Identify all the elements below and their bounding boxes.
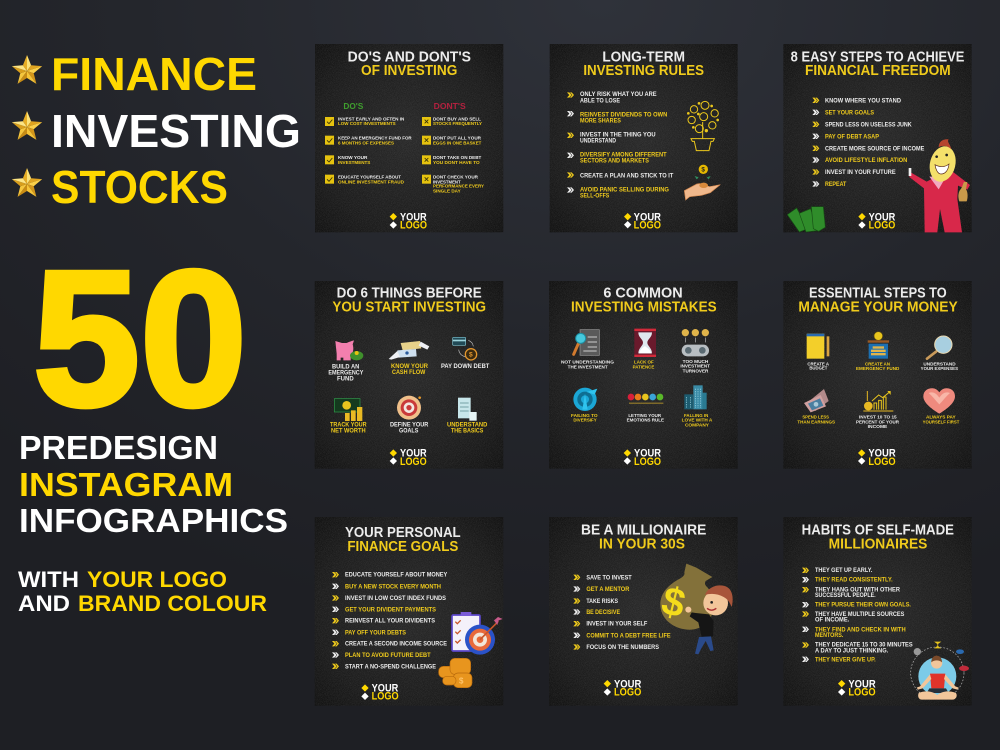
title [791,49,965,79]
text block: predesign instagram infographics: INSTAGRAM [19,466,233,503]
column: dont's: DONT TAKE ON DEBT [433,155,481,161]
list of rules: INVEST IN THE THING YOU [580,133,656,139]
title [571,286,717,316]
title: OF INVESTING [361,63,457,79]
item: create an emergency fund: CREATE AN [865,361,890,367]
column: dont's: SINGLE DAY [433,188,461,194]
item: falling in love with a company: LOVE WITH A [682,418,713,424]
item: spend less [797,389,836,425]
item: not understanding: THE INVESTMENT [568,364,608,370]
column: do's: INVESTMENTS [338,160,371,166]
item: emotions rule: LETTING YOUR [628,413,661,419]
item: invest percent of income: INVEST 10 TO 15 [859,415,897,421]
list of tips [573,575,671,651]
item: failing to diversify [571,388,598,424]
title: LONG-TERM [602,49,685,65]
column: dont's: DONT PUT ALL YOUR [433,136,481,142]
icon: gold coins [439,658,472,688]
column: do's: KNOW YOUR [338,155,368,161]
item: falling in love with a company: COMPANY [685,422,710,428]
list of tips: INVEST IN YOUR SELF [586,622,648,628]
column: dont's: YOU DONT HAVE TO [433,160,480,166]
title: MILLIONAIRES [829,536,928,552]
list of habits: THEY HANG OUT WITH OTHER [815,587,901,593]
logo [858,211,896,232]
item: falling in love with a company: FALLING IN [684,413,709,419]
column: dont's: DONT CHECK YOUR [433,175,478,181]
item: invest percent of income: INCOME [868,424,888,430]
big number 50: 50 [33,230,247,446]
column: dont's: DONT'S [434,101,466,111]
list of rules: SELL-OFFS [580,194,609,200]
list of steps: REPEAT [825,182,847,188]
column: dont's: EGGS IN ONE BASKET [433,140,481,146]
list of steps: KNOW WHERE YOU STAND [825,98,902,104]
text block: with your logo and brand colour: BRAND COLOUR [78,591,267,616]
icon: green money [787,207,825,232]
title [332,286,486,316]
column: do's: LOW COST INVESTMENTS [338,121,396,127]
logo: YOUR [372,682,399,694]
list of habits: A DAY TO JUST THINKING. [815,648,889,654]
logo: YOUR [869,211,896,223]
item: understand your expenses [921,336,959,372]
column: do's: 6 MONTHS OF EXPENSES [338,140,395,146]
heading: investing: INVESTING [51,105,301,157]
item: spend less: THAN EARNINGS [797,419,836,425]
column: dont's: PERFORMANCE EVERY [433,184,485,190]
icon: star 1 [12,55,42,84]
list of goals: PAY OFF YOUR DEBTS [345,630,406,636]
icon: boy carrying money bag [657,564,733,654]
title: FINANCIAL FREEDOM [805,63,951,79]
item: invest percent of income [856,391,899,430]
item: invest percent of income: PERCENT OF YOUR [856,419,899,425]
item: emergency fund: BUILD AN [332,365,359,371]
title: ESSENTIAL STEPS TO [809,286,947,302]
logo: LOGO [400,456,427,468]
text block: predesign instagram infographics [19,429,288,539]
item: cash flow: KNOW YOUR [391,364,429,370]
list of goals: PLAN TO AVOID FUTURE DEBT [345,653,431,659]
list of steps: SET YOUR GOALS [825,110,874,116]
list of habits: THEY HAVE MULTIPLE SOURCES [815,612,904,618]
logo: LOGO [614,686,641,698]
logo: LOGO [634,219,661,231]
list of tips: BE DECISIVE [586,610,620,616]
column: dont's [422,101,485,194]
logo: YOUR [848,678,876,690]
logo: YOUR [400,448,427,460]
list of tips: TAKE RISKS [586,599,618,605]
list of steps: SPEND LESS ON USELESS JUNK [825,122,912,128]
title: BE A MILLIONAIRE [581,522,707,538]
list of steps [812,98,924,188]
panel: 8 easy steps to achieve financial freedom [783,44,972,232]
list of tips: COMMIT TO A DEBT FREE LIFE [586,633,671,639]
column: do's: DO'S [343,101,364,111]
list of habits: MENTORS. [815,633,844,639]
list of rules: MORE SHARES [580,118,621,124]
logo [390,448,427,468]
item: net worth: TRACK YOUR [330,423,367,429]
text block: with your logo and brand colour: WITH [18,567,79,592]
list of habits: THEY PURSUE THEIR OWN GOALS. [815,603,911,609]
item: create a budget: BUDGET [809,366,827,372]
title: DO 6 THINGS BEFORE [337,286,482,302]
list of goals: START A NO-SPEND CHALLENGE [345,664,436,670]
title: INVESTING RULES [583,63,704,79]
list of rules: DIVERSIFY AMONG DIFFERENT [580,153,667,159]
item: emergency fund: EMERGENCY [328,371,363,377]
column: do's [325,101,412,185]
list of tips: SAVE TO INVEST [586,575,632,581]
item: understand your expenses: YOUR EXPENSES [921,366,959,372]
list of goals: BUY A NEW STOCK EVERY MONTH [345,584,441,590]
item: define goals: DEFINE YOUR [390,423,429,429]
list of habits: THEY NEVER GIVE UP. [815,657,876,663]
item: too much turnover: TOO MUCH [683,359,709,365]
icon: hand with coin: $ [701,167,705,174]
item: lack of patience: LACK OF [634,360,654,366]
item: net worth: NET WORTH [331,429,366,435]
text block: with your logo and brand colour: AND [18,591,70,616]
list of goals: CREATE A SECOND INCOME SOURCE [345,642,447,648]
icon: clipboard and target [452,612,503,655]
logo [624,448,661,468]
item: not understanding [561,330,614,370]
column: dont's: DONT BUY AND SELL [433,116,481,122]
item: pay down debt: $ [469,352,473,359]
column: do's: ONLINE INVESTMENT FRAUD [338,179,404,185]
title: HABITS OF SELF-MADE [802,522,954,538]
heading: stocks: STOCKS [51,161,228,213]
title [581,522,707,552]
list of habits: SUCCESSFUL PEOPLE. [815,593,876,599]
list of rules [567,92,674,200]
icon: money tree [687,101,719,151]
item: create an emergency fund [856,332,900,372]
logo: YOUR [868,448,896,460]
title [798,286,958,316]
item: net worth [330,399,367,435]
item: lack of patience [633,329,656,370]
panel: be a millionaire in your 30s [549,517,738,706]
title [583,49,704,79]
icon: meditating person [911,642,969,700]
item: understand your expenses: UNDERSTAND [923,361,956,367]
panel: 6 common investing mistakes [549,281,738,469]
title: 8 EASY STEPS TO ACHIEVE [791,49,965,65]
list of habits: THEY FIND AND CHECK IN WITH [815,627,906,633]
item: cash flow [389,341,429,376]
logo: YOUR [634,448,661,460]
list of rules: ONLY RISK WHAT YOU ARE [580,92,657,98]
logo [838,678,876,698]
logo [390,211,427,232]
title: INVESTING MISTAKES [571,300,717,316]
item: emergency fund [328,340,363,383]
list of goals: EDUCATE YOURSELF ABOUT MONEY [345,573,447,579]
item: always pay yourself first [923,388,959,425]
list of steps: AVOID LIFESTYLE INFLATION [825,158,907,164]
item: too much turnover [680,329,710,374]
panel: habits of self-made millionaires [783,517,972,706]
logo [624,211,661,231]
logo [361,682,399,703]
logo [858,448,896,468]
text block: predesign instagram infographics: PREDESIGN [19,429,218,466]
logo: LOGO [868,456,896,468]
panel: essential steps to manage your money [783,281,972,469]
title: YOU START INVESTING [332,300,486,316]
item: too much turnover: TURNOVER [683,368,709,374]
list of goals [332,572,447,670]
logo: YOUR [400,211,427,223]
list of goals: GET YOUR DIVIDENT PAYMENTS [345,607,436,613]
list of rules: AVOID PANIC SELLING DURING [580,188,669,194]
logo: LOGO [869,220,895,232]
panel: your personal finance goals [315,517,503,706]
text block: with your logo and brand colour [18,567,267,616]
logo: LOGO [372,691,399,703]
list of steps: CREATE MORE SOURCE OF INCOME [825,146,924,152]
list of habits [802,568,913,663]
list of rules: ABLE TO LOSE [580,98,620,104]
item: lack of patience: PATIENCE [633,364,655,370]
item: create an emergency fund: EMERGENCY FUND [856,366,900,372]
list of habits: THEY DEDICATE 15 TO 30 MINUTES [815,642,913,648]
item: always pay yourself first: ALWAYS PAY [926,415,956,421]
icon: star 2 [12,111,42,140]
heading: finance: FINANCE [51,48,257,100]
text block: predesign instagram infographics: INFOGRAPHICS [19,502,288,539]
logo: YOUR [614,678,642,690]
title: FINANCE GOALS [347,539,459,555]
logo: LOGO [634,456,661,468]
list of rules: CREATE A PLAN AND STICK TO IT [580,173,674,179]
title: IN YOUR 30S [599,536,685,552]
logo: YOUR [634,211,661,223]
title: YOUR PERSONAL [345,525,461,541]
panel: do's and dont's of investing [315,44,503,232]
item: failing to diversify: FAILING TO [571,413,598,419]
item: define goals: GOALS [399,429,418,435]
item: create a budget: CREATE A [807,361,829,367]
item: understand the basics [447,398,488,435]
list of steps: INVEST IN YOUR FUTURE [825,170,896,176]
icon: gold coins: $ [459,677,464,686]
title: DO'S AND DONT'S [348,49,471,65]
icon: hand with coin [684,165,720,200]
text block: with your logo and brand colour: YOUR LOGO [87,567,227,592]
column: dont's: STOCKS FREQUENTLY [433,121,483,127]
item: falling in love with a company [682,385,713,428]
list of habits: OF INCOME. [815,618,850,624]
item: understand the basics: UNDERSTAND [447,423,488,429]
column: do's: INVEST EARLY AND OFTEN IN [338,116,405,122]
list of habits: THEY READ CONSISTENTLY. [815,578,893,584]
panel: long-term investing rules [550,44,738,232]
column: do's: KEEP AN EMERGENCY FUND FOR [338,136,412,142]
item: create a budget [807,334,829,372]
item: spend less: SPEND LESS [802,415,830,421]
logo: LOGO [400,220,427,232]
item: not understanding: NOT UNDERSTANDING [561,360,614,366]
item: failing to diversify: DIVERSIFY [573,418,597,424]
list of rules: SECTORS AND MARKETS [580,159,649,165]
item: understand the basics: THE BASICS [451,429,483,435]
list of tips: FOCUS ON THE NUMBERS [586,645,659,651]
item: cash flow: CASH FLOW [392,370,426,376]
icon: boy carrying money bag: $ [657,579,690,627]
item: emergency fund: FUND [337,377,354,383]
icon: star 3 [12,168,42,197]
column: dont's: INVESTMENT [433,179,461,185]
title [345,525,461,555]
icon: rich man in red suit [909,139,970,232]
item: define goals [390,396,429,435]
item: too much turnover: INVESTMENT [680,364,710,370]
title [348,49,471,79]
list of steps: PAY OF DEBT ASAP [825,134,879,140]
column: do's: EDUCATE YOURSELF ABOUT [338,175,401,181]
title [802,522,954,552]
item: always pay yourself first: YOURSELF FIRST [923,419,959,425]
title: 6 COMMON [603,286,683,302]
list of habits: THEY GET UP EARLY. [815,568,873,574]
list of rules: REINVEST DIVIDENDS TO OWN [580,112,667,118]
item: pay down debt [441,337,490,370]
list of tips: GET A MENTOR [586,587,630,593]
list of rules: UNDERSTAND [580,139,617,145]
item: emotions rule: EMOTIONS RULE [627,418,665,424]
title: MANAGE YOUR MONEY [798,300,958,316]
list of goals: REINVEST ALL YOUR DIVIDENTS [345,619,435,625]
item: emotions rule [627,394,665,424]
panel: do 6 things before you start investing [315,281,503,469]
list of goals: INVEST IN LOW COST INDEX FUNDS [345,596,446,602]
logo: LOGO [848,686,876,698]
item: pay down debt: PAY DOWN DEBT [441,364,490,370]
logo [604,678,642,698]
